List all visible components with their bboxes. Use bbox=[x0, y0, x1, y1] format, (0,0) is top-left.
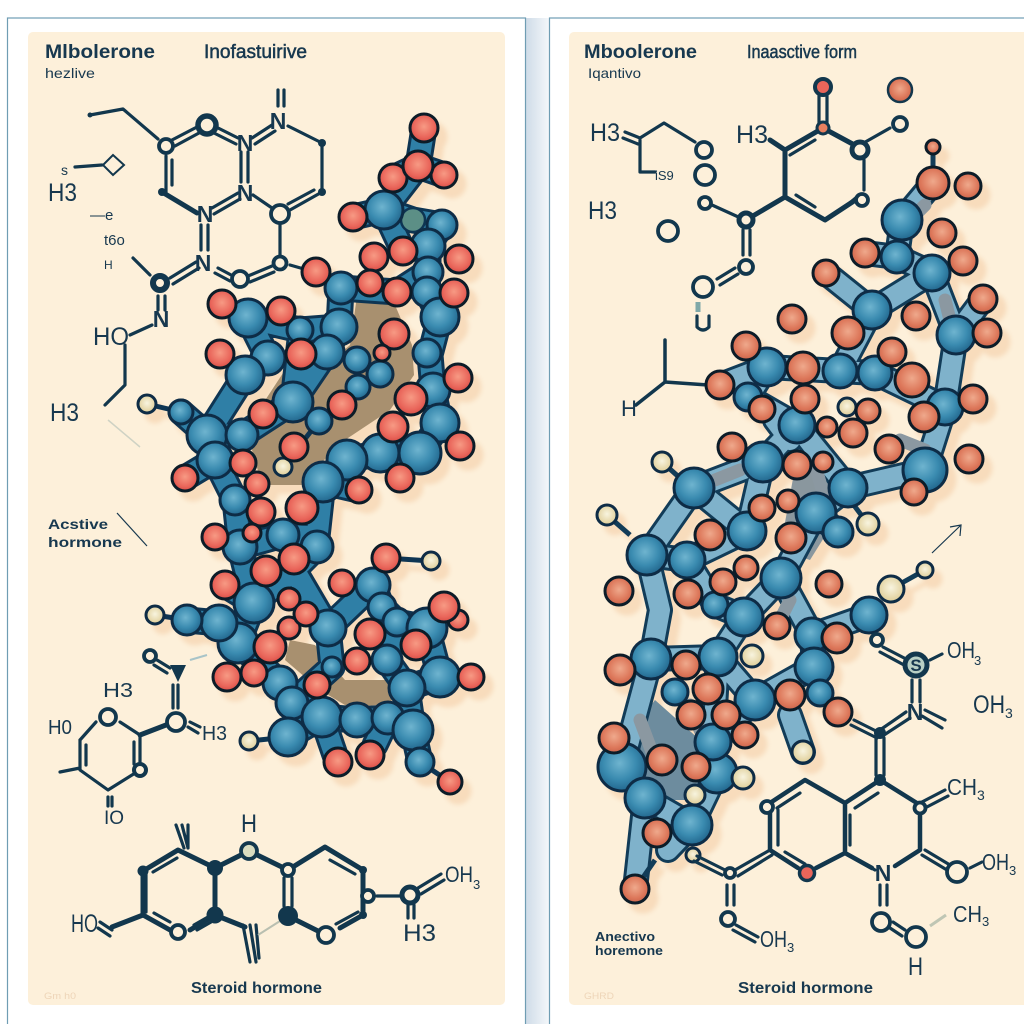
heading: right form label: Inaasctive form bbox=[747, 42, 857, 62]
chemical structure: right lower rings: S bbox=[910, 656, 922, 675]
chemical structure: right lower rings bbox=[694, 634, 1016, 981]
chemical structure: right top: H3 bbox=[588, 197, 617, 225]
chemical structure: left small ring bbox=[48, 650, 227, 829]
chemical structure: left top: H3 bbox=[50, 399, 79, 427]
chemical structure: right lower rings: 3 bbox=[974, 653, 981, 668]
chemical structure: left small ring: H0 bbox=[48, 717, 72, 739]
chemical structure: right top: H bbox=[621, 396, 637, 421]
heading: left form label: Inofastuirive bbox=[204, 42, 307, 63]
heading: right title: Mboolerone bbox=[584, 42, 697, 63]
panel: right card bbox=[550, 18, 1024, 1024]
chemical structure: right lower rings: OH bbox=[947, 637, 975, 663]
chemical structure: left steroid rings: OH bbox=[445, 862, 473, 887]
chemical structure: left top: N bbox=[237, 130, 253, 156]
chemical structure: left steroid rings: HO bbox=[71, 910, 98, 938]
chemical structure: right lower rings: OH bbox=[982, 849, 1009, 875]
chemical structure: left top: N bbox=[197, 201, 213, 227]
chemical structure: right lower rings: 3 bbox=[982, 914, 989, 929]
chemical structure: right lower rings: 3 bbox=[787, 940, 794, 955]
chemical structure: right lower rings: N bbox=[907, 699, 923, 725]
caption: right steroid hormone: Steroid hormone bbox=[738, 980, 873, 997]
chemical structure: right top: H3 bbox=[590, 119, 620, 147]
chemical structure: left steroid rings: H bbox=[241, 810, 257, 838]
chemical structure: left top: N bbox=[237, 180, 253, 206]
chemical structure: left top: HO bbox=[93, 323, 129, 351]
chemical structure: right top bbox=[588, 78, 961, 553]
chemical structure: left top: t6o bbox=[104, 232, 125, 249]
text: left subtitle: hezlive bbox=[45, 65, 95, 81]
chemical structure: left steroid rings bbox=[71, 810, 480, 962]
caption: left steroid hormone: Steroid hormone bbox=[191, 980, 322, 997]
chemical structure: right top: iS9 bbox=[655, 168, 674, 183]
drop shadow: left molecule bbox=[146, 123, 492, 803]
heading: left title: Mlbolerone bbox=[45, 42, 155, 63]
chemical structure: left small ring: H3 bbox=[103, 680, 133, 702]
drop shadow: right molecule bbox=[605, 149, 1009, 912]
chemical structure: left small ring: IO bbox=[104, 808, 124, 829]
chemical structure: left top bbox=[48, 90, 326, 447]
chemical structure: left top: —e bbox=[90, 207, 113, 224]
chemical structure: left top: s bbox=[61, 162, 68, 178]
text: right active hormone label: Anectivo bbox=[595, 930, 655, 944]
text: left active hormone label: Acstive bbox=[48, 517, 109, 532]
chemical structure: left top: H3 bbox=[48, 179, 77, 207]
text: right subtitle: Iqantivo bbox=[588, 65, 641, 81]
text: right active hormone label bbox=[595, 930, 663, 958]
molecule: left 3D ball and stick bbox=[138, 114, 484, 794]
chemical structure: left small ring: H3 bbox=[202, 723, 227, 745]
chemical structure: right lower rings: CH bbox=[953, 901, 982, 927]
molecule: right 3D ball and stick bbox=[597, 140, 1001, 903]
chemical structure: left top: N bbox=[270, 108, 286, 134]
chemical structure: left top: H bbox=[104, 258, 113, 272]
chemical structure: left top: N bbox=[153, 306, 169, 332]
text: right active hormone label: horemone bbox=[595, 944, 663, 958]
chemical structure: left top: N bbox=[195, 250, 211, 276]
chemical structure: right lower rings: 3 bbox=[1009, 863, 1016, 878]
panel: left card bbox=[8, 18, 526, 1024]
chemical structure: left steroid rings: H3 bbox=[403, 920, 436, 947]
panel shadow between cards bbox=[526, 18, 549, 1024]
chemical structure: right lower rings: OH bbox=[760, 926, 787, 952]
caption: right faint footer: GHRD bbox=[584, 991, 615, 1001]
chemical structure: right lower rings: 3 bbox=[1005, 705, 1013, 721]
text: left active hormone label bbox=[48, 513, 147, 550]
chemical structure: left steroid rings: 3 bbox=[473, 877, 480, 892]
chemical structure: right lower rings: CH bbox=[947, 774, 977, 800]
chemical structure: right top: H3 bbox=[736, 121, 768, 149]
text: left active hormone label: hormone bbox=[48, 535, 123, 550]
chemical structure: right lower rings: N bbox=[875, 860, 891, 886]
caption: left faint footer: Gm h0 bbox=[44, 991, 76, 1001]
chemical structure: right lower rings: OH bbox=[973, 691, 1005, 719]
chemical structure: right lower rings: 3 bbox=[977, 787, 985, 803]
chemical structure: right lower rings: H bbox=[908, 953, 923, 981]
